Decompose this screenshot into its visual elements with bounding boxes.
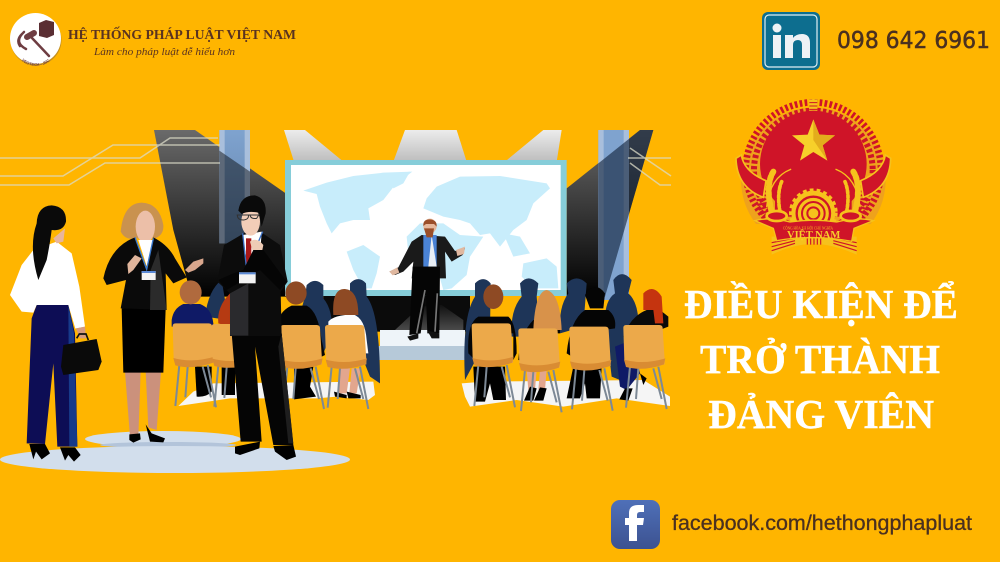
national emblem	[736, 99, 891, 255]
standing silhouettes	[205, 274, 639, 383]
attendee 8	[615, 289, 668, 401]
attendee 5	[468, 284, 517, 402]
attendee 7	[567, 287, 615, 398]
under-screen stage wall	[323, 295, 470, 332]
emblem ribbon left	[736, 155, 766, 197]
audience right	[468, 284, 668, 402]
logo	[10, 13, 62, 66]
facebook address: facebook.com/hethongphapluat	[672, 512, 972, 535]
woman with badge	[103, 203, 203, 443]
spotlight floor	[395, 305, 463, 330]
site name: HỆ THỐNG PHÁP LUẬT VIỆT NAM	[68, 25, 296, 43]
stage platform	[378, 330, 465, 360]
title line 3: ĐẢNG VIÊN	[708, 391, 934, 437]
attendee 2	[218, 293, 235, 395]
emblem gear	[791, 191, 835, 235]
woman with bag	[10, 205, 102, 462]
emblem rice left	[767, 169, 791, 212]
emblem banner	[755, 219, 873, 241]
emblem bows	[767, 211, 861, 221]
icon: linkedin	[762, 12, 820, 70]
conference scene	[154, 130, 670, 412]
title line 1: ĐIỀU KIỆN ĐỂ	[684, 281, 958, 327]
floor ellipses	[0, 431, 350, 473]
logo cube	[39, 20, 54, 38]
projection screen	[285, 160, 567, 296]
tagline: Làm cho pháp luật dễ hiểu hơn	[93, 46, 236, 58]
emblem rice right	[836, 169, 860, 212]
floor patches right	[462, 380, 670, 407]
logo badge	[10, 14, 62, 66]
emblem star	[792, 119, 835, 161]
speaker	[389, 219, 465, 341]
emblem name: VIỆT NAM	[787, 228, 841, 241]
logo gavel	[18, 32, 49, 56]
attendee 3	[278, 281, 325, 399]
attendee 6	[518, 290, 562, 401]
foreground people	[10, 195, 296, 462]
attendee 1	[172, 280, 214, 397]
audience left	[172, 280, 368, 399]
chairs	[173, 323, 667, 412]
right pillar	[598, 130, 653, 300]
logo ring text: VEOTECH - JSC	[22, 58, 50, 66]
floor patches left	[178, 382, 375, 406]
left dark wall	[154, 130, 287, 297]
emblem base	[772, 237, 857, 255]
man with glasses	[217, 195, 296, 460]
left pillar	[219, 130, 250, 243]
emblem red disc	[760, 111, 867, 217]
decorative circuit lines	[0, 138, 671, 185]
icon: facebook	[611, 500, 660, 549]
right dark wall	[567, 130, 653, 297]
title line 2: TRỞ THÀNH	[700, 336, 940, 382]
ceiling lights	[284, 130, 562, 162]
emblem ribbon right	[861, 155, 891, 197]
emblem motto: CỘNG HÒA XÃ HỘI CHỦ NGHĨA	[783, 226, 834, 231]
emblem wreath	[741, 99, 886, 238]
phone number: 098 642 6961	[837, 28, 990, 54]
title	[684, 281, 958, 437]
attendee 4	[328, 289, 368, 398]
world map	[303, 172, 558, 290]
